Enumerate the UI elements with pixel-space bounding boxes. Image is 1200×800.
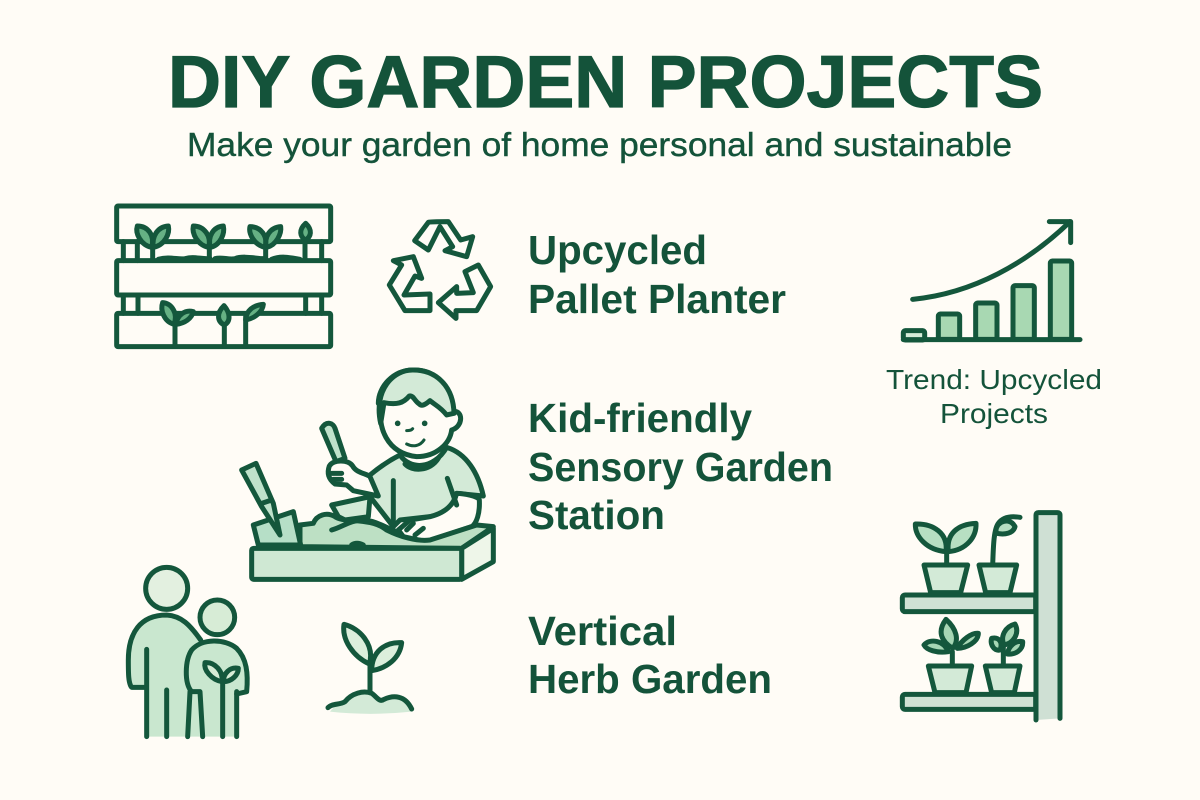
- box: [462, 528, 493, 579]
- shirt: [370, 447, 483, 527]
- icon: pallet planter: [117, 206, 331, 347]
- chart caption: [886, 364, 1102, 429]
- hand: [328, 461, 378, 496]
- label: Kid-friendly Sensory Garden Station: Sensory Garden: [528, 444, 833, 490]
- subtitle: Make your garden of home personal and sustainable: [187, 126, 1012, 163]
- tool in hand: [322, 423, 345, 462]
- icon: child in sensory garden box: [242, 370, 493, 579]
- icon: seedling: [328, 624, 412, 714]
- label: Kid-friendly Sensory Garden Station: Kid-friendly: [528, 395, 752, 441]
- label: Upcycled Pallet Planter: Pallet Planter: [528, 276, 786, 322]
- upper pots: [924, 565, 968, 593]
- chart caption: Projects: [940, 398, 1048, 429]
- chart caption: Trend: Upcycled: [886, 364, 1102, 395]
- title: DIY GARDEN PROJECTS: [168, 42, 1043, 123]
- arm: [398, 493, 479, 542]
- soil: [300, 514, 493, 548]
- label: Kid-friendly Sensory Garden Station: Station: [528, 492, 665, 538]
- trowel held: [332, 497, 370, 520]
- icon: vertical herb shelf: [902, 513, 1060, 720]
- icon: recycling arrows: [389, 222, 491, 318]
- label: Vertical Herb Garden: Vertical: [528, 608, 677, 654]
- label: Vertical Herb Garden: Herb Garden: [528, 656, 772, 702]
- icon: adult and child: [128, 567, 247, 737]
- lower pots: [928, 666, 972, 693]
- head: [378, 370, 461, 457]
- trowel in box: [253, 512, 301, 545]
- chart: upcycled trend: [903, 222, 1080, 340]
- label: Upcycled Pallet Planter: Upcycled: [528, 227, 707, 273]
